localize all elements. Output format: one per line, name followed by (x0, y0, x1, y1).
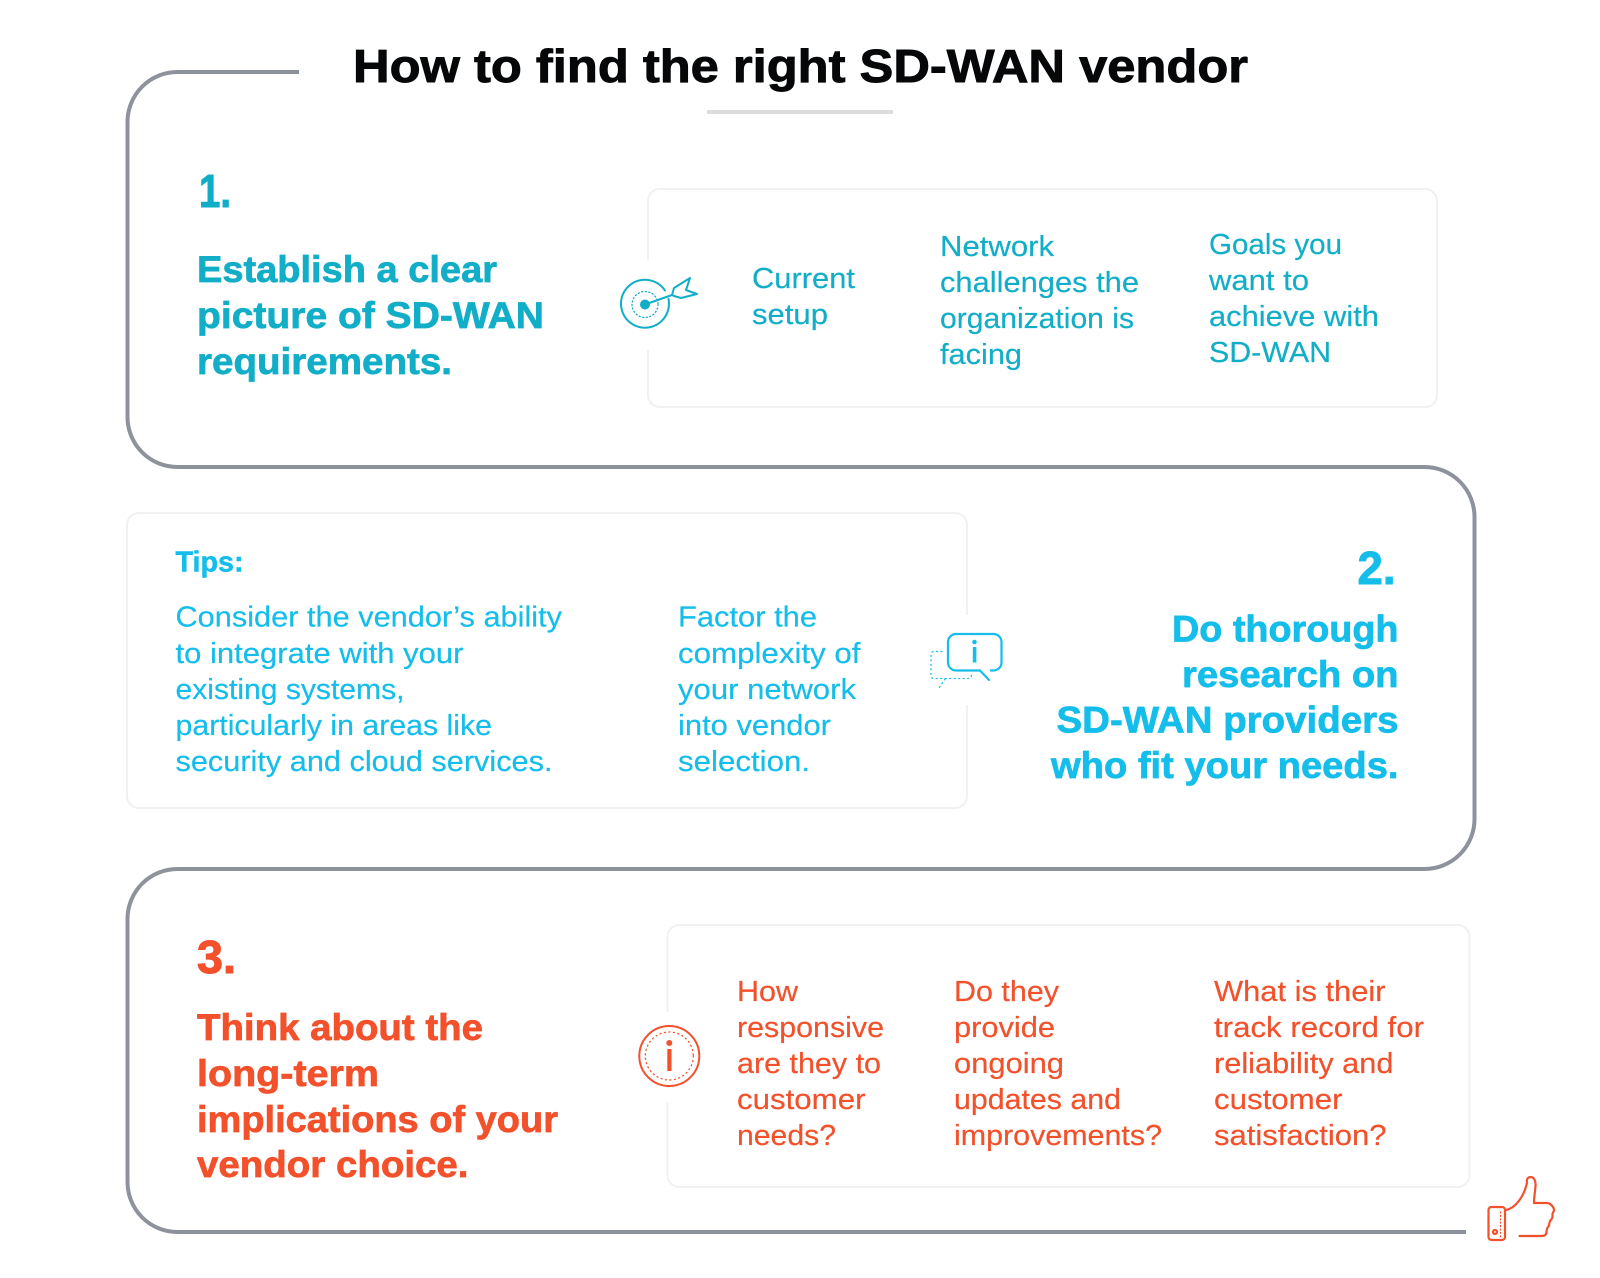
question: track record: customer (1214, 1084, 1343, 1116)
question: track record: reliability and (1214, 1048, 1394, 1080)
requirement: goals: want to (1208, 265, 1309, 297)
requirement: network challenges: organization is (940, 303, 1134, 335)
question: responsiveness: responsive (737, 1012, 884, 1044)
winding frame line (128, 72, 1474, 1232)
question: ongoing updates: ongoing (954, 1048, 1064, 1080)
step 3 heading: vendor choice. (197, 1144, 468, 1185)
question: ongoing updates: provide (954, 1012, 1055, 1044)
tip: network complexity: your network (678, 674, 857, 706)
step 3 heading: Think about the (197, 1007, 483, 1048)
requirement: network challenges: Network (940, 231, 1055, 263)
step 1 heading: picture of SD-WAN (197, 295, 544, 336)
step 3 heading: long-term (197, 1053, 379, 1094)
panel: step 3 (197, 925, 1470, 1187)
step 2 heading: SD-WAN providers (1056, 700, 1398, 740)
step 1 requirements box (640, 189, 1437, 407)
question: ongoing updates: updates and (954, 1084, 1121, 1116)
step 3 number: 3. (197, 931, 236, 983)
question: track record: What is their (1214, 976, 1386, 1008)
step 2 number: 2. (1358, 542, 1396, 594)
requirement: network challenges: challenges the (940, 267, 1139, 299)
step 3 questions box (659, 925, 1470, 1187)
step 1 heading: requirements. (197, 341, 452, 382)
tip: integration: to integrate with your (176, 638, 464, 670)
tips label: Tips: (176, 546, 244, 578)
question: track record (1214, 976, 1424, 1152)
question: responsiveness (737, 976, 884, 1152)
title: How to find the right SD-WAN vendor (353, 40, 1248, 92)
question: ongoing updates: improvements? (954, 1120, 1162, 1152)
tip: network complexity (678, 602, 862, 778)
tip: network complexity: complexity of (678, 638, 862, 670)
question: responsiveness: customer (737, 1084, 866, 1116)
tip: integration: existing systems, (176, 674, 404, 706)
requirement: current setup: setup (752, 299, 828, 331)
requirement: network challenges (940, 231, 1139, 371)
step 2 heading: Do thorough (1172, 608, 1398, 650)
question: track record: track record for (1214, 1012, 1424, 1044)
tip: integration: particularly in areas like (176, 710, 492, 742)
step 2 heading: who fit your needs. (1050, 745, 1398, 786)
panel: step 2 (127, 513, 1398, 808)
panel: step 1 (197, 165, 1437, 407)
step 2 heading: research on (1182, 654, 1398, 695)
requirement: goals: Goals you (1209, 229, 1342, 261)
icon: chat bubbles with info (931, 634, 1002, 688)
requirement: goals (1208, 229, 1379, 369)
tip: network complexity: selection. (678, 746, 810, 778)
icon: info circle (639, 1026, 699, 1086)
tip: network complexity: into vendor (678, 710, 831, 742)
tip: integration: Consider the vendor’s ability (176, 602, 563, 634)
icon: thumbs up (1488, 1177, 1554, 1240)
question: responsiveness: are they to (737, 1048, 881, 1080)
requirement: current setup: Current (752, 263, 855, 295)
step 1 heading: Establish a clear (197, 249, 497, 290)
tip: network complexity: Factor the (678, 602, 817, 634)
question: responsiveness: How (737, 976, 799, 1008)
tips box (127, 513, 976, 808)
step 1 number: 1. (199, 165, 231, 217)
step 1 heading (197, 249, 544, 382)
step 3 heading: implications of your (197, 1099, 558, 1140)
tip: integration (176, 602, 563, 778)
question: responsiveness: needs? (737, 1120, 836, 1152)
question: ongoing updates (954, 976, 1162, 1152)
title underline (707, 110, 893, 114)
step 2 heading (1050, 608, 1398, 786)
requirement: goals: achieve with (1209, 301, 1379, 333)
tip: integration: security and cloud services. (176, 746, 552, 778)
step 3 heading (197, 1007, 558, 1185)
question: ongoing updates: Do they (954, 976, 1060, 1008)
requirement: current setup (752, 263, 855, 331)
requirement: goals: SD-WAN (1209, 337, 1331, 369)
icon: target with dart (621, 278, 697, 328)
question: track record: satisfaction? (1214, 1120, 1386, 1152)
requirement: network challenges: facing (940, 339, 1022, 371)
